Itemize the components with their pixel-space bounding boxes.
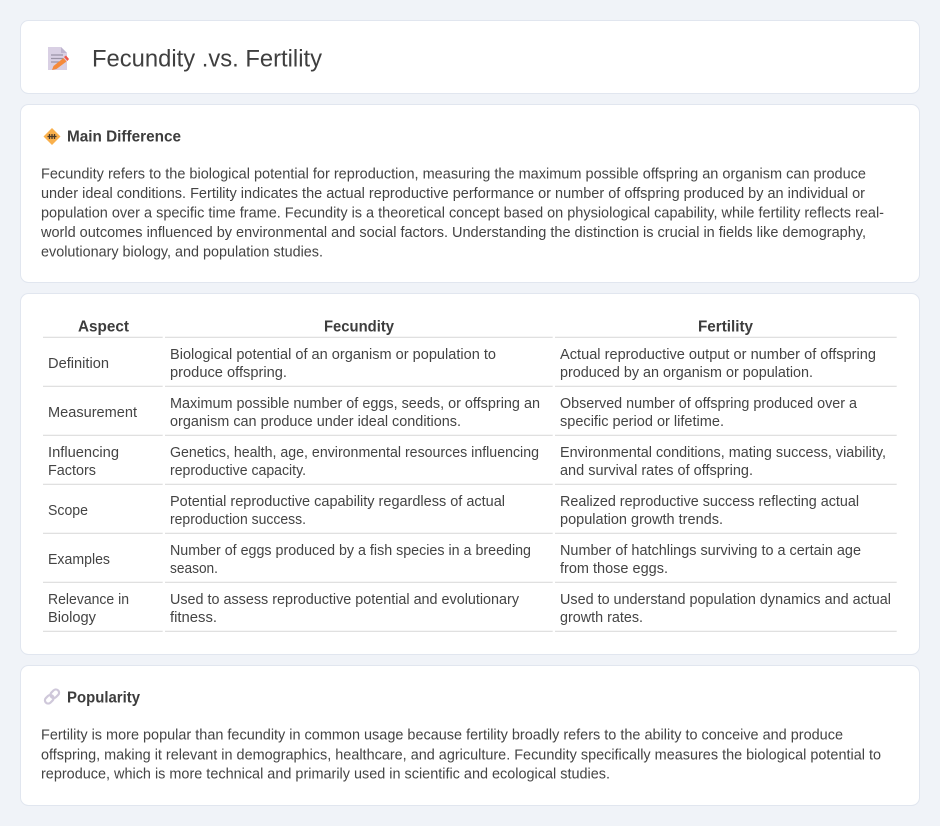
text block: main difference body: world outcomes influenced by environmental and social factors. Understanding the distinction is crucial in fields like demography, [40,225,866,241]
table row: definition [43,347,897,387]
table row: scope: Scope [48,503,88,519]
table row: definition: Biological potential of an organism or population to [170,347,496,363]
text block: main difference body: evolutionary biology, and population studies. [41,244,323,260]
panel: popularity [20,666,920,806]
table row: measurement: Measurement [48,405,137,421]
table row: relevance in biology: Used to understand population dynamics and actual [560,592,891,608]
text block: main difference body: under ideal conditions. Fertility indicates the actual reproductive performance or number of offspring produced by an individual or [41,186,865,202]
title: Fecundity .vs. Fertility [92,46,322,72]
text block: popularity body: reproduce, which is more technical and primarily used in scientific and ecological studies. [41,766,610,782]
table row: scope: Potential reproductive capability regardless of actual [170,494,505,510]
table row: scope: Realized reproductive success reflecting actual [560,494,859,510]
text block: popularity body: Fertility is more popular than fecundity in common usage because fertility broadly refers to the ability to conceive and produce [41,728,843,744]
table row: measurement [43,396,897,436]
table row: examples: season. [170,561,218,577]
panel: title header [20,20,920,94]
table row: scope [43,494,897,534]
text block: popularity body: offspring, making it relevant in demographics, healthcare, and agriculture. Fecundity specifically measures the biological potential to [41,748,881,764]
table row: relevance in biology: Used to assess reproductive potential and evolutionary [170,592,520,608]
heading: popularity: Popularity [67,690,140,706]
table row: definition: produced by an organism or population. [560,365,813,381]
table row: relevance in biology: fitness. [170,610,217,626]
panel: comparison table [20,294,920,654]
table row: relevance in biology: Biology [48,610,97,626]
table row: definition: Actual reproductive output or number of offspring [560,347,876,363]
table header row: Fertility [698,318,753,336]
table row: influencing factors: Genetics, health, age, environmental resources influencing [170,445,539,461]
text block: popularity body [41,728,881,782]
table row: influencing factors: Influencing [48,445,119,461]
heading: main difference: Main Difference [67,128,181,146]
table row: measurement: Maximum possible number of eggs, seeds, or offspring an [170,396,540,412]
table row: relevance in biology [43,592,897,632]
icon: document with pencil [48,47,69,70]
table row: examples: Number of eggs produced by a fish species in a breeding [170,543,531,559]
icon: chain link [44,688,60,705]
table row: relevance in biology: Relevance in [48,592,129,608]
table row: influencing factors [43,445,897,485]
icon: diamond sign [44,128,60,145]
table row: measurement: specific period or lifetime. [560,414,724,430]
table row: measurement: organism can produce under ideal conditions. [170,414,461,430]
table row: examples: Number of hatchlings surviving to a certain age [560,543,861,559]
table row: scope: population growth trends. [560,512,723,528]
table row: scope: reproduction success. [170,512,306,528]
panel: main difference [20,104,920,282]
table row: definition: Definition [48,356,109,372]
table row: examples [43,543,897,583]
table header row: Fecundity [324,318,394,336]
table row: influencing factors: Factors [48,463,96,479]
table row: influencing factors: reproductive capacity. [170,463,306,479]
text block: main difference body: Fecundity refers to the biological potential for reproduction, measuring the maximum possible offspring an organism can produce [41,166,866,182]
table row: examples: from those eggs. [560,561,668,577]
text block: main difference body: population over a specific time frame. Fecundity is a theoretical concept based on physiological capability, while fertility reflects real- [41,206,884,222]
table row: definition: produce offspring. [170,365,287,381]
table row: influencing factors: and survival rates of offspring. [560,463,753,479]
table header row [43,318,897,338]
table row: relevance in biology: growth rates. [560,610,643,626]
table row: measurement: Observed number of offspring produced over a [560,396,858,412]
table row: influencing factors: Environmental conditions, mating success, viability, [560,445,886,461]
text block: main difference body [40,166,884,260]
table header row: Aspect [78,318,130,336]
table row: examples: Examples [48,552,110,568]
